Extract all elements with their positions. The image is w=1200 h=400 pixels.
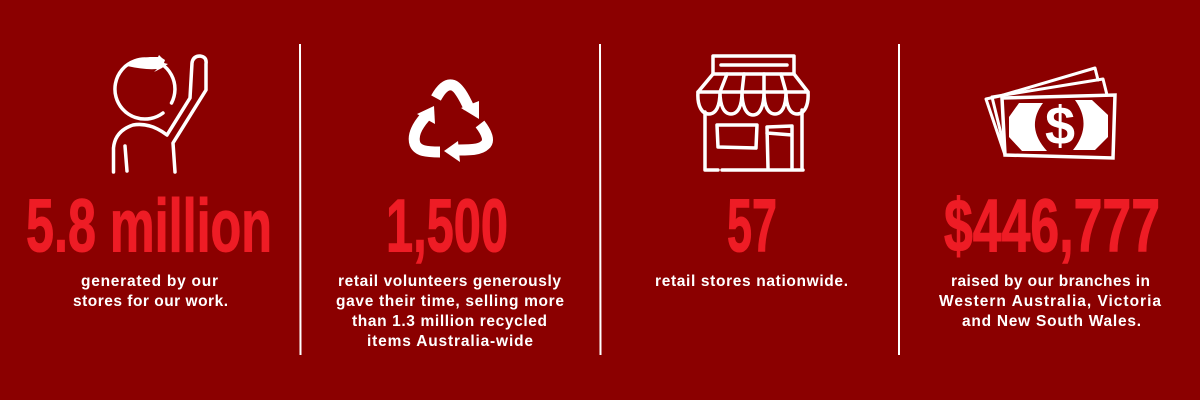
stat: 57: 57 — [727, 184, 777, 268]
stat: 5.8 million: 5.8 million — [26, 184, 272, 268]
panel: funds raised — [939, 68, 1161, 330]
icon: banknotes — [986, 68, 1115, 158]
text: retail volunteers: than 1.3 million recycled — [352, 313, 547, 330]
text: retail volunteers — [336, 273, 564, 350]
panel: volunteers — [336, 85, 564, 350]
panel: sales revenue — [26, 55, 272, 310]
text: raised by our branches: raised by our branches in — [951, 273, 1150, 290]
text: retail volunteers: items Australia-wide — [367, 333, 533, 350]
text: raised by our branches — [939, 273, 1161, 330]
icon: recycling arrows — [414, 85, 487, 162]
text: generated by our stores — [73, 273, 228, 310]
stat: 1,500: 1,500 — [386, 184, 508, 268]
text: retail volunteers: gave their time, selling more — [336, 293, 564, 310]
icon: storefront — [698, 56, 808, 170]
text: retail volunteers: retail volunteers generously — [338, 273, 561, 290]
text: retail stores nationwide: retail stores nationwide. — [655, 273, 848, 290]
icon: banknotes: $ — [1045, 96, 1075, 156]
text: generated by our stores: generated by our — [81, 273, 218, 290]
panel: stores — [655, 56, 848, 290]
icon: person raising hand — [114, 55, 206, 172]
text: raised by our branches: Western Australia, Victoria — [939, 293, 1161, 310]
text: generated by our stores: stores for our work. — [73, 293, 228, 310]
text: raised by our branches: and New South Wales. — [962, 313, 1141, 330]
